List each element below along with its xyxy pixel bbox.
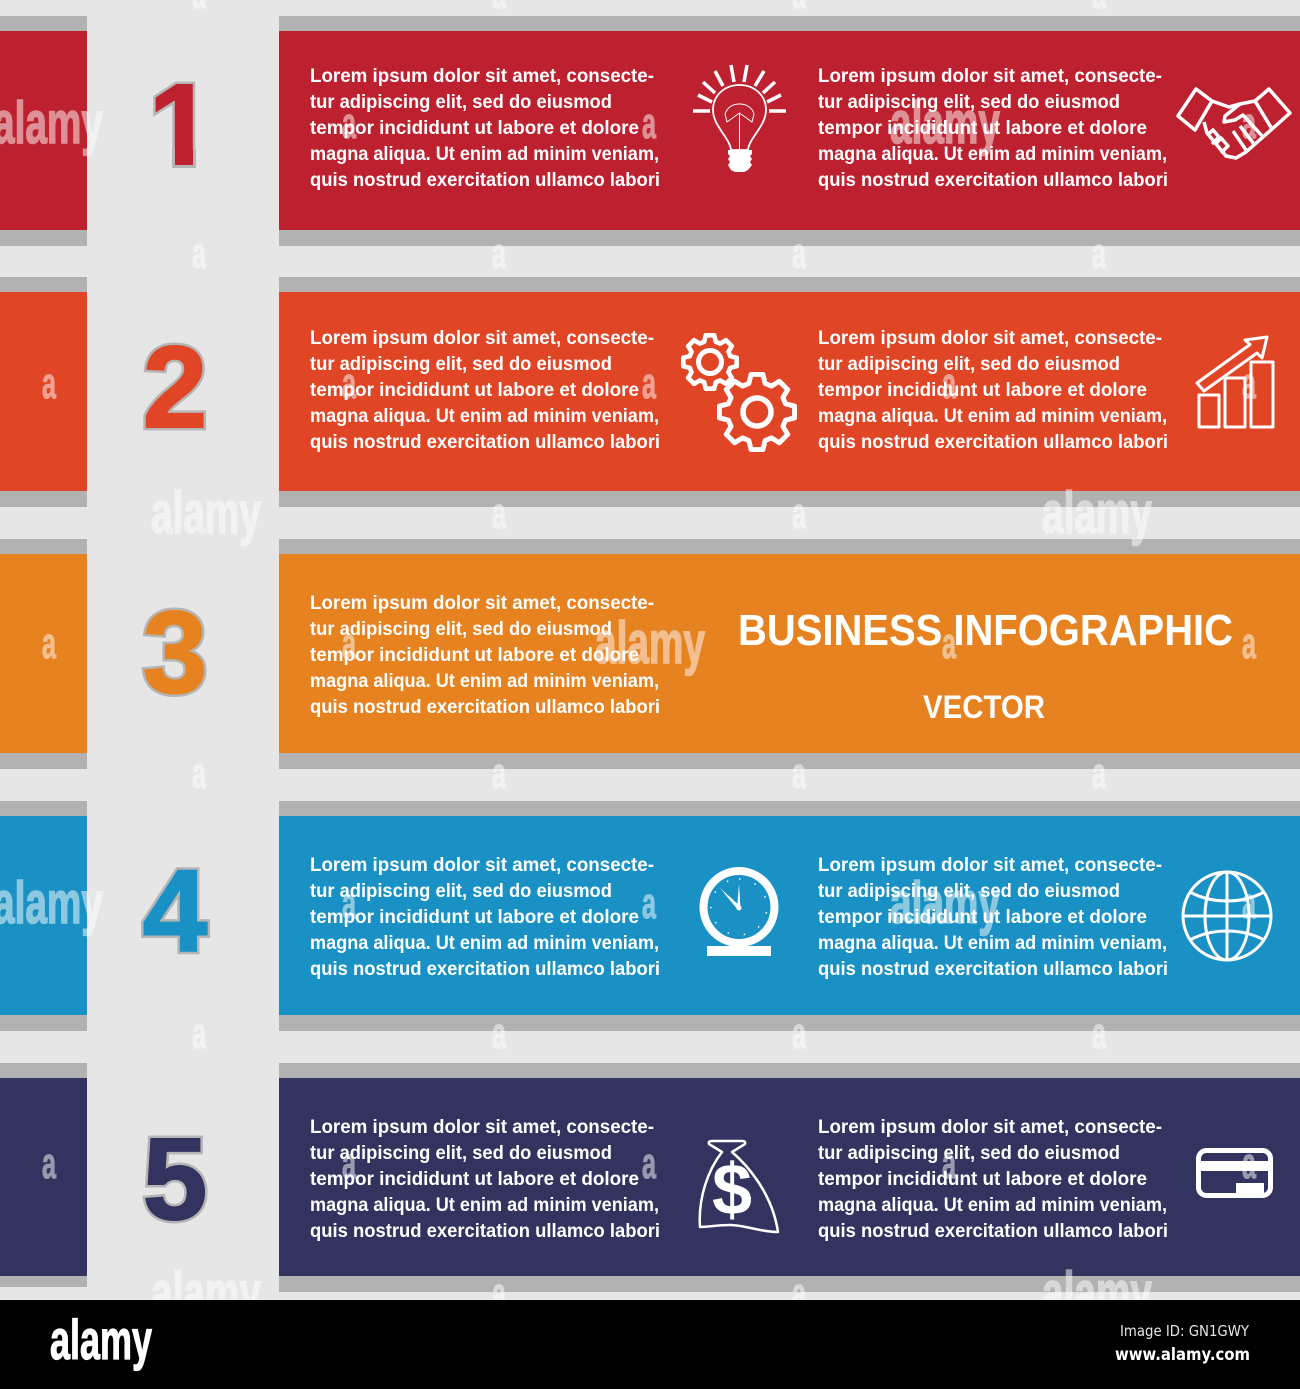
number 3: 3 [143,587,207,717]
icon: globe [1183,872,1271,960]
text block: row 1 right: tempor incididunt ut labore et dolore [818,118,1147,139]
image id: Image ID: GN1GWY [1120,1322,1249,1340]
watermarks: a [642,1139,656,1188]
text block: row 3 left: quis nostrud exercitation ullamco labori [310,697,660,718]
icon: clock [704,871,774,956]
watermarks: a [492,489,506,538]
text block: row 4 right: tempor incididunt ut labore et dolore [818,907,1147,928]
text block: row 5 right: Lorem ipsum dolor sit amet, consecte- [818,1117,1162,1138]
number 3: 3 [143,587,207,717]
number 1: 1 [149,60,213,190]
text block: row 5 left [310,1117,660,1242]
watermarks: a [1242,879,1256,928]
text block: row 4 left: tur adipiscing elit, sed do eiusmod [310,881,612,902]
icon: growth chart [1197,337,1273,427]
panel: row 2 [0,277,1300,507]
watermarks: alamy [595,610,705,676]
watermarks: a [1242,359,1256,408]
text block: row 5 right: tur adipiscing elit, sed do eiusmod [818,1143,1120,1164]
text block: row 5 left: tur adipiscing elit, sed do eiusmod [310,1143,612,1164]
text block: row 1 left: tempor incididunt ut labore et dolore [310,118,639,139]
text block: row 2 right: tempor incididunt ut labore et dolore [818,380,1147,401]
text block: row 2 right [818,328,1168,453]
text block: row 2 left: quis nostrud exercitation ullamco labori [310,432,660,453]
watermarks: a [342,1139,356,1188]
watermarks: a [792,1269,806,1318]
text block: row 5 right: magna aliqua. Ut enim ad minim veniam, [818,1195,1167,1216]
text block: row 1 left: Lorem ipsum dolor sit amet, consecte- [310,66,654,87]
text block: row 2 left [310,328,660,453]
watermarks: a [42,1139,56,1188]
number 1: 1 [149,60,213,190]
watermarks: alamy [890,870,1000,936]
text block: row 5 right: quis nostrud exercitation ullamco labori [818,1221,1168,1242]
text block: row 1 left: magna aliqua. Ut enim ad minim veniam, [310,144,659,165]
text block: row 3 left: Lorem ipsum dolor sit amet, consecte- [310,593,654,614]
text block: row 3 left: tur adipiscing elit, sed do eiusmod [310,619,612,640]
watermarks: a [642,359,656,408]
text block: row 4 right: Lorem ipsum dolor sit amet, consecte- [818,855,1162,876]
watermarks: a [192,1009,206,1058]
watermarks: a [642,99,656,148]
text block: row 4 left [310,855,660,980]
title: BUSINESS INFOGRAPHIC [738,606,1233,655]
panel: row 1 [0,16,1300,246]
watermarks: a [192,749,206,798]
number 4: 4 [143,846,207,976]
website: www.alamy.com [1115,1345,1250,1364]
text block: row 1 right [818,66,1168,191]
watermarks: a [792,229,806,278]
watermarks: a [342,619,356,668]
watermarks: a [792,749,806,798]
watermarks: alamy [890,90,1000,156]
text block: row 2 right: tur adipiscing elit, sed do eiusmod [818,354,1120,375]
watermarks: alamy [1042,1260,1152,1326]
subtitle: VECTOR [923,689,1045,725]
watermarks: a [792,489,806,538]
number 4: 4 [143,846,207,976]
text block: row 2 right: quis nostrud exercitation ullamco labori [818,432,1168,453]
watermarks: a [42,359,56,408]
number 2: 2 [143,322,207,452]
text block: row 4 right: quis nostrud exercitation ullamco labori [818,959,1168,980]
text block: row 2 left: magna aliqua. Ut enim ad minim veniam, [310,406,659,427]
text block: row 4 right: magna aliqua. Ut enim ad minim veniam, [818,933,1167,954]
text block: row 1 right: quis nostrud exercitation ullamco labori [818,170,1168,191]
text block: row 5 right [818,1117,1168,1242]
watermarks: a [642,879,656,928]
text block: row 2 right: Lorem ipsum dolor sit amet, consecte- [818,328,1162,349]
watermarks: a [942,1139,956,1188]
number 5: 5 [143,1114,207,1244]
watermarks: a [192,229,206,278]
text block: row 3 left: magna aliqua. Ut enim ad minim veniam, [310,671,659,692]
watermarks: a [342,99,356,148]
text block: row 4 right: tur adipiscing elit, sed do eiusmod [818,881,1120,902]
icon: credit card [1198,1150,1271,1196]
icon: gears [683,335,795,450]
number 2: 2 [143,322,207,452]
watermarks: a [1242,1139,1256,1188]
watermarks: a [1092,1009,1106,1058]
panel: row 5 [0,1063,1300,1292]
watermarks: a [1092,749,1106,798]
watermarks: a [942,619,956,668]
watermarks: a [492,1009,506,1058]
text block: row 1 right: magna aliqua. Ut enim ad minim veniam, [818,144,1167,165]
text block: row 5 left: magna aliqua. Ut enim ad minim veniam, [310,1195,659,1216]
icon: money bag [700,1141,778,1232]
number 5: 5 [143,1114,207,1244]
text block: row 4 left: magna aliqua. Ut enim ad minim veniam, [310,933,659,954]
text block: row 1 left [310,66,660,191]
text block: row 5 left: tempor incididunt ut labore et dolore [310,1169,639,1190]
text block: row 3 left: tempor incididunt ut labore et dolore [310,645,639,666]
watermarks: a [792,1009,806,1058]
panel: row 4 [0,801,1300,1031]
watermarks: a [492,229,506,278]
watermarks: alamy [151,480,261,546]
watermarks: a [1092,229,1106,278]
number 1 [153,82,196,168]
footer bar [0,1300,1300,1389]
watermarks: a [342,359,356,408]
text block: row 5 left: quis nostrud exercitation ullamco labori [310,1221,660,1242]
panel: row 3 [0,539,1300,769]
watermarks: a [42,619,56,668]
text block: row 1 left: quis nostrud exercitation ullamco labori [310,170,660,191]
watermarks: a [1242,619,1256,668]
text block: row 1 right: Lorem ipsum dolor sit amet, consecte- [818,66,1162,87]
watermarks: a [342,879,356,928]
text block: row 1 left: tur adipiscing elit, sed do eiusmod [310,92,612,113]
text block: row 5 left: Lorem ipsum dolor sit amet, consecte- [310,1117,654,1138]
footer logo: alamy [50,1308,152,1371]
watermarks: alamy [1042,480,1152,546]
text block: row 4 left: tempor incididunt ut labore et dolore [310,907,639,928]
icon: light bulb [693,65,786,172]
text block: row 2 right: magna aliqua. Ut enim ad minim veniam, [818,406,1167,427]
icon: handshake [1178,89,1290,158]
text block: row 1 right: tur adipiscing elit, sed do eiusmod [818,92,1120,113]
text block: row 4 left: Lorem ipsum dolor sit amet, consecte- [310,855,654,876]
text block: row 2 left: Lorem ipsum dolor sit amet, consecte- [310,328,654,349]
text block: row 2 left: tur adipiscing elit, sed do eiusmod [310,354,612,375]
watermarks: alamy [151,1260,261,1326]
text block: row 2 left: tempor incididunt ut labore et dolore [310,380,639,401]
text block: row 4 left: quis nostrud exercitation ullamco labori [310,959,660,980]
text block: row 4 right [818,855,1168,980]
watermarks: a [492,1269,506,1318]
text block: row 3 left [310,593,660,718]
text block: row 5 right: tempor incididunt ut labore et dolore [818,1169,1147,1190]
watermarks: a [1242,99,1256,148]
icon: money bag: $ [712,1150,752,1230]
watermarks: a [942,359,956,408]
watermarks: a [492,749,506,798]
